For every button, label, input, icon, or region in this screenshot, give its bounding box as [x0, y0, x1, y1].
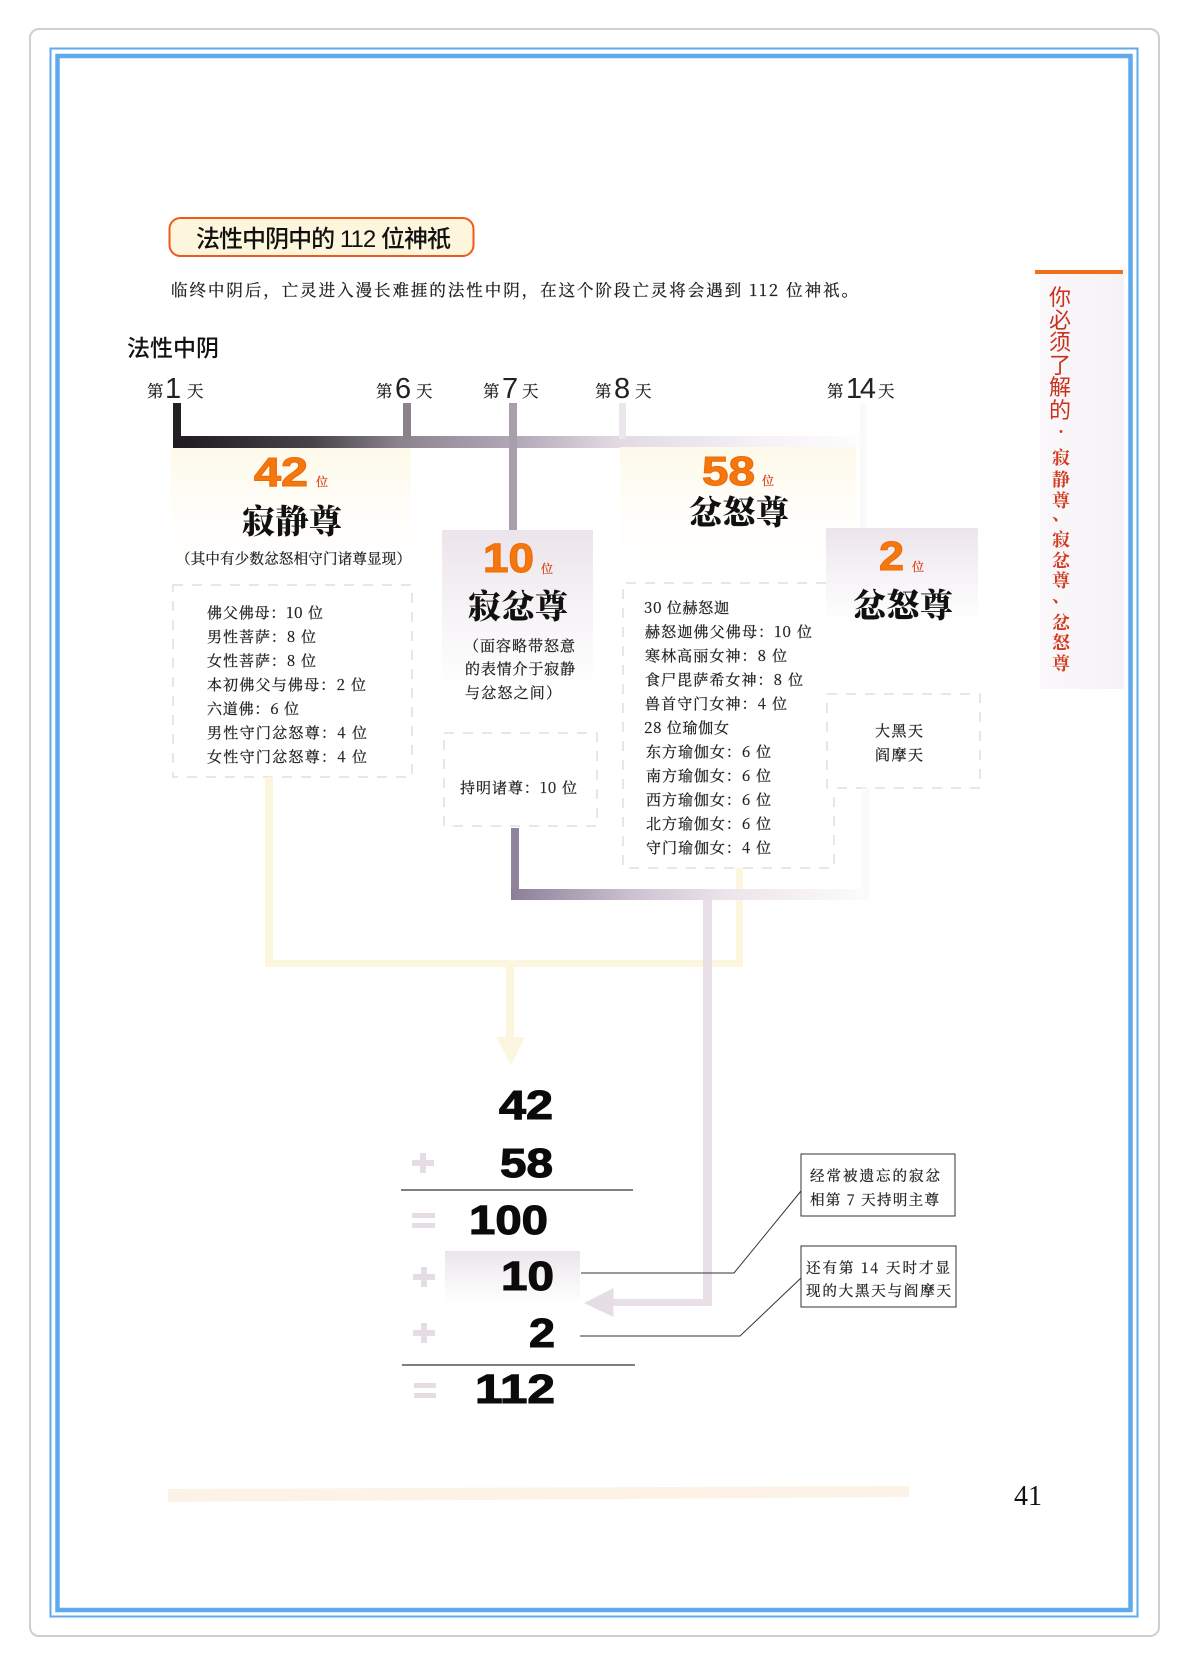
panel: 10 knowledge holders: 位 [541, 560, 553, 577]
connector: lavender total of 10 and 2 [511, 788, 870, 1317]
panel: 10 knowledge holders: 寂忿尊 [468, 581, 568, 628]
callout: day 14 deities: 还有第 14 天时才显 [806, 1257, 950, 1278]
panel: 10 knowledge holders: （面容略带怒意 [464, 635, 575, 656]
panel: 58 wrathful deities: 位 [762, 472, 774, 489]
panel: 2 wrathful protectors: 2 [879, 533, 904, 579]
side tab: chapter label: 你必须了解的 [1049, 285, 1071, 423]
timeline day labels [147, 373, 894, 405]
sum column: 112 [475, 1366, 555, 1412]
sum column: 2 [529, 1310, 555, 1356]
sum column: 58 [500, 1140, 553, 1186]
panel: 42 peaceful deities: 女性菩萨：8 位 [207, 650, 316, 671]
timeline bars [173, 403, 866, 530]
panel: 42 peaceful deities: 佛父佛母：10 位 [207, 602, 323, 623]
timeline day labels: 天 [878, 378, 894, 402]
panel: 10 knowledge holders [442, 530, 597, 826]
panel: 42 peaceful deities: 42 [254, 449, 308, 495]
panel: 58 wrathful deities: 西方瑜伽女：6 位 [646, 789, 771, 810]
timeline day labels: 天 [635, 378, 652, 402]
timeline day labels: 1 [165, 373, 181, 405]
panel: 2 wrathful protectors: 忿怒尊 [853, 580, 953, 627]
panel: 58 wrathful deities: 东方瑜伽女：6 位 [646, 741, 771, 762]
panel: 58 wrathful deities: 寒林高丽女神：8 位 [645, 645, 787, 666]
callout: day 7 deities: 相第 7 天持明主尊 [810, 1189, 939, 1210]
panel: 10 knowledge holders: 的表情介于寂静 [465, 658, 575, 679]
panel: 42 peaceful deities: 女性守门忿怒尊：4 位 [207, 746, 367, 767]
timeline day labels: 8 [614, 373, 630, 405]
panel: 10 knowledge holders: 持明诸尊：10 位 [460, 777, 577, 798]
timeline day labels: 第 [483, 378, 500, 402]
sum column: 42 [499, 1082, 553, 1128]
callout: day 7 deities [581, 1154, 955, 1273]
panel: 2 wrathful protectors [826, 528, 980, 788]
diagram heading: 法性中阴 [127, 335, 219, 361]
sum rules [401, 1190, 635, 1365]
panel: 58 wrathful deities: 北方瑜伽女：6 位 [646, 813, 771, 834]
panel: 58 wrathful deities: 30 位赫怒迦 [644, 597, 729, 618]
panel: 2 wrathful protectors: 大黑天 [875, 720, 923, 741]
page number: 41 [1014, 1481, 1042, 1512]
sum: highlight behind 10 [445, 1251, 580, 1317]
panel: 2 wrathful protectors: 位 [912, 558, 924, 575]
panel: 42 peaceful deities: 本初佛父与佛母：2 位 [207, 674, 366, 695]
panel: 10 knowledge holders: 10 [483, 535, 534, 581]
connector: yellow total of 42 and 58 [265, 777, 743, 1065]
sum column: 10 [501, 1253, 554, 1299]
panel: 42 peaceful deities: 寂静尊 [242, 496, 342, 543]
panel: 42 peaceful deities: 男性菩萨：8 位 [207, 626, 316, 647]
callout: day 7 deities: 经常被遗忘的寂忿 [810, 1165, 940, 1186]
panel: 42 peaceful deities: 六道佛：6 位 [207, 698, 299, 719]
timeline day labels: 第 [147, 378, 164, 402]
section title pill: 法性中阴中的 112 位神祇 [196, 226, 451, 253]
panel: 58 wrathful deities [620, 447, 856, 868]
callout: day 14 deities [580, 1246, 956, 1336]
timeline day labels: 第 [827, 378, 844, 402]
panel: 10 knowledge holders: 与忿怒之间） [465, 682, 561, 703]
sum column [469, 1082, 555, 1412]
panel: 58 wrathful deities: 58 [702, 448, 755, 494]
panel: 58 wrathful deities: 守门瑜伽女：4 位 [646, 837, 771, 858]
timeline day labels: 7 [502, 373, 518, 405]
panel: 58 wrathful deities: 忿怒尊 [689, 487, 789, 534]
timeline day labels: 天 [522, 378, 538, 402]
panel: 58 wrathful deities: 南方瑜伽女：6 位 [646, 765, 771, 786]
panel: 2 wrathful protectors: 阎摩天 [875, 744, 923, 765]
timeline day labels: 第 [595, 378, 612, 402]
panel: 58 wrathful deities: 28 位瑜伽女 [644, 717, 729, 738]
panel: 58 wrathful deities: 赫怒迦佛父佛母：10 位 [645, 621, 812, 642]
side tab: chapter label [1035, 270, 1124, 689]
timeline day labels: 天 [187, 378, 204, 402]
panel: 42 peaceful deities: 男性守门忿怒尊：4 位 [207, 722, 367, 743]
sum column: 100 [469, 1197, 548, 1243]
timeline day labels: 第 [376, 378, 392, 402]
callout: day 14 deities: 现的大黑天与阎摩天 [806, 1280, 952, 1301]
plus and equals signs [412, 1153, 436, 1398]
panel: 58 wrathful deities: 食尸毘萨希女神：8 位 [645, 669, 803, 690]
side tab: chapter label: ·寂静尊、寂忿尊、忿怒尊 [1052, 418, 1072, 676]
panel: 42 peaceful deities: 位 [316, 473, 328, 490]
panel: 42 peaceful deities [171, 448, 412, 777]
timeline day labels: 14 [846, 373, 876, 405]
intro paragraph: 临终中阴后，亡灵进入漫长难捱的法性中阴，在这个阶段亡灵将会遇到 112 位神祇。 [171, 277, 858, 301]
footer strip [168, 1486, 909, 1502]
section title pill [170, 218, 474, 256]
panel: 42 peaceful deities: （其中有少数忿怒相守门诸尊显现） [176, 548, 411, 569]
timeline day labels: 6 [395, 373, 411, 405]
timeline day labels: 天 [416, 378, 432, 402]
panel: 58 wrathful deities: 兽首守门女神：4 位 [645, 693, 787, 714]
